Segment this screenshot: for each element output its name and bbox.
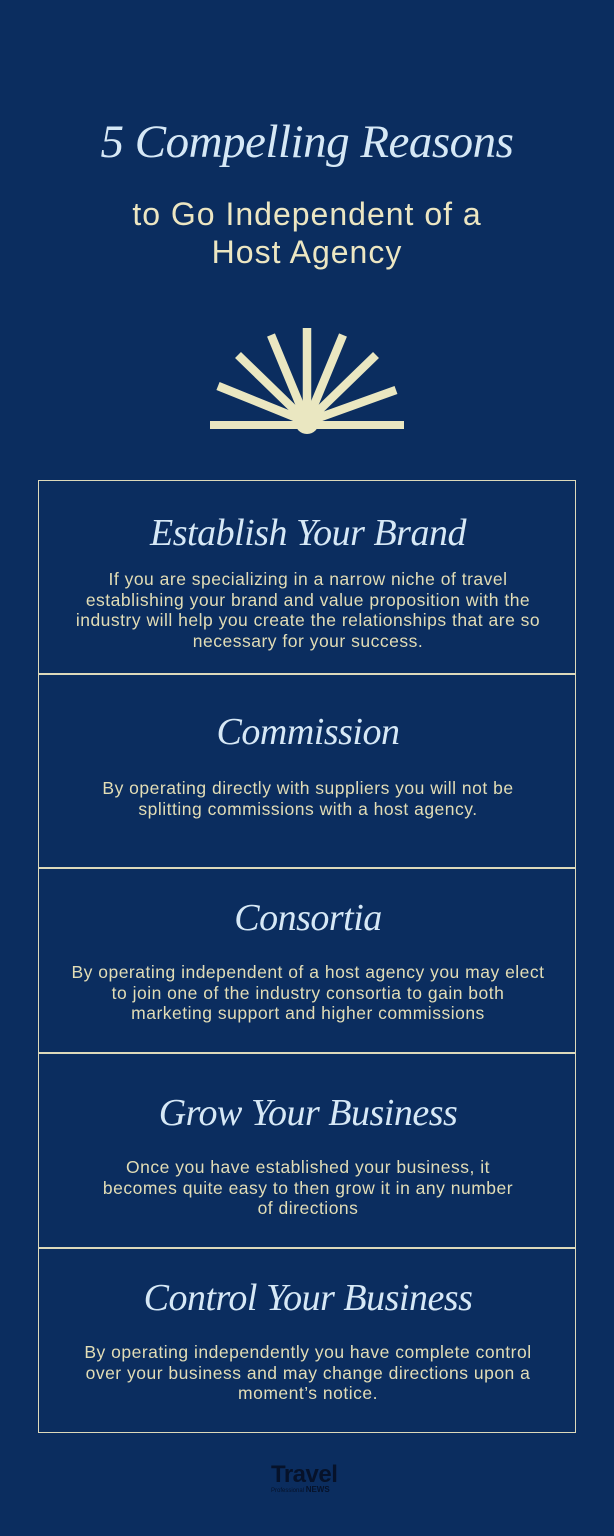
panel: consortia [38,867,576,1054]
panel: commission [38,673,576,869]
panel: grow your business [38,1052,576,1249]
panel: control your business: Control Your Business [144,1277,472,1319]
panel: grow your business: Once you have established your business, it [126,1157,490,1177]
panel: establish your brand: If you are specializing in a narrow niche of travel [108,569,508,589]
logo: Travel [271,1461,337,1488]
panel: grow your business: Grow Your Business [159,1092,457,1134]
panel: control your business: moment’s notice. [238,1383,378,1403]
panel: grow your business: becomes quite easy to then grow it in any number [103,1178,513,1198]
panel: control your business: By operating independently you have complete control [84,1342,532,1362]
subtitle [132,196,482,270]
panel: establish your brand: necessary for your success. [193,630,423,650]
panel: establish your brand: establishing your brand and value proposition with the [86,590,530,610]
panel: establish your brand [38,480,576,675]
panel: grow your business: of directions [258,1198,358,1218]
panel: control your business [38,1247,576,1433]
panel: consortia: By operating independent of a host agency you may elect [71,962,545,982]
icon: sunburst [210,328,404,434]
panel: commission: Commission [217,711,399,753]
panel: control your business: over your business and may change directions upon a [86,1362,530,1382]
panel: commission: splitting commissions with a host agency. [138,798,478,818]
panel: establish your brand: Establish Your Brand [150,512,466,554]
panel: consortia: to join one of the industry consortia to gain both [112,982,504,1002]
subtitle: to Go Independent of a [132,196,482,232]
subtitle: Host Agency [212,234,402,270]
panel: consortia: Consortia [234,897,382,939]
panel: commission: By operating directly with suppliers you will not be [102,778,514,798]
title: 5 Compelling Reasons [100,116,513,168]
logo: Professional NEWS [271,1485,330,1494]
panel: establish your brand: industry will help you create the relationships that are so [76,610,540,630]
panel: consortia: marketing support and higher commissions [131,1003,485,1023]
